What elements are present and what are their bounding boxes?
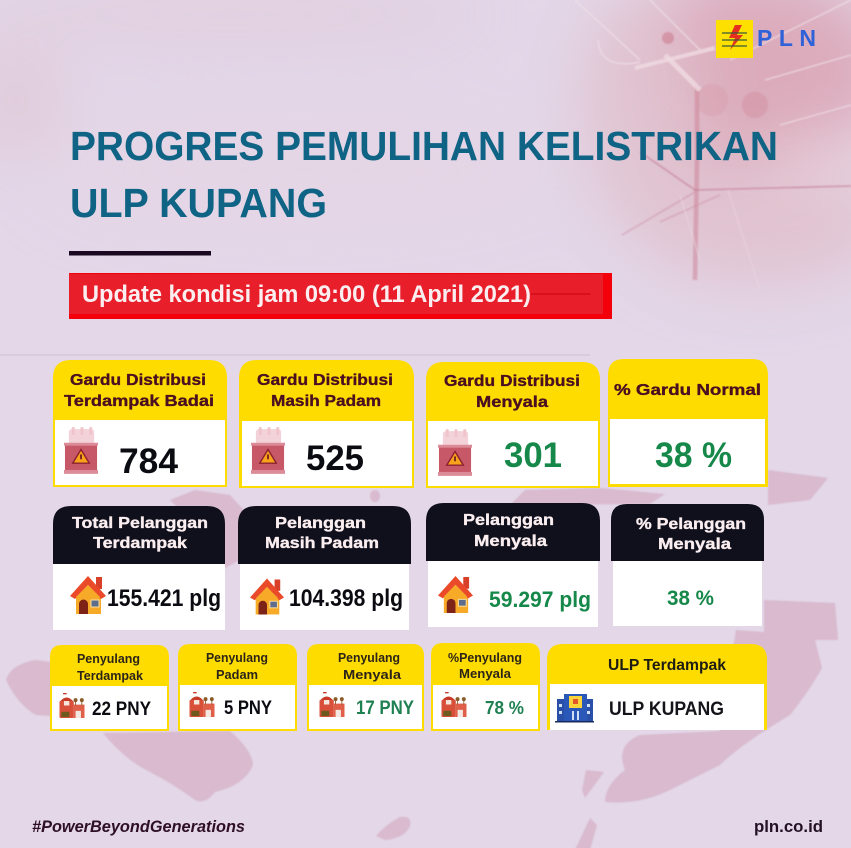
panel: gardu terdampak: Terdampak Badai	[64, 393, 214, 410]
panel: ulp terdampak	[547, 644, 767, 730]
panel: persen penyulang	[431, 643, 540, 731]
icon: house	[70, 576, 106, 614]
panel: pelanggan menyala: 59.297 plg	[489, 587, 591, 612]
panel: persen pelanggan	[611, 504, 764, 626]
icon: house	[438, 576, 473, 613]
icon: transformer	[64, 427, 98, 474]
panel: penyulang padam: Padam	[216, 667, 258, 682]
panel: total pelanggan	[53, 506, 225, 630]
panel: pelanggan padam: Masih Padam	[265, 535, 379, 552]
panel: pelanggan menyala: Pelanggan	[463, 512, 554, 529]
panel: total pelanggan: 155.421 plg	[107, 585, 221, 612]
panel: penyulang terdampak: 22 PNY	[92, 699, 151, 720]
update banner	[69, 273, 612, 319]
icon: substation building	[442, 692, 466, 717]
panel: total pelanggan: Total Pelanggan	[72, 515, 208, 532]
update banner: Update kondisi jam 09:00 (11 April 2021)	[82, 281, 531, 308]
panel: persen gardu normal	[608, 359, 768, 487]
icon: substation building	[190, 692, 214, 717]
icon: transformer	[438, 429, 472, 476]
title rule	[69, 251, 211, 256]
title	[70, 123, 778, 226]
panel: persen penyulang: 78 %	[485, 698, 524, 718]
panel: gardu padam: Masih Padam	[271, 393, 381, 410]
panel: penyulang terdampak: Terdampak	[77, 668, 144, 683]
panel: gardu menyala: Menyala	[476, 394, 548, 411]
panel: pelanggan padam: Pelanggan	[275, 515, 366, 532]
panel: persen gardu normal: 38 %	[655, 436, 732, 475]
panel: gardu terdampak	[53, 360, 227, 487]
panel: penyulang terdampak: Penyulang	[77, 651, 140, 666]
hashtag: #PowerBeyondGenerations	[32, 817, 245, 836]
logo: PLN: PLN	[757, 25, 816, 51]
panel: pelanggan menyala	[426, 503, 600, 627]
icon: substation building	[320, 692, 344, 717]
panel: persen penyulang: %Penyulang	[448, 650, 522, 665]
panel: ulp terdampak: ULP Terdampak	[608, 657, 726, 674]
panel: gardu menyala: Gardu Distribusi	[444, 373, 580, 390]
map of islands	[6, 470, 838, 848]
icon: transformer	[251, 427, 285, 474]
icon: office building	[555, 694, 594, 722]
panel: gardu padam: 525	[306, 439, 364, 478]
panel: penyulang padam: Penyulang	[206, 650, 268, 665]
panel: total pelanggan: Terdampak	[93, 535, 187, 552]
panel: persen pelanggan: 38 %	[667, 587, 714, 610]
panel: penyulang menyala: 17 PNY	[356, 698, 414, 719]
panel: persen penyulang: Menyala	[459, 666, 512, 681]
panel: gardu terdampak: 784	[119, 442, 179, 481]
panel: penyulang menyala	[307, 644, 424, 731]
photo: damaged power pole	[575, 0, 851, 290]
website: pln.co.id	[754, 817, 823, 836]
icon: substation building	[60, 693, 84, 718]
panel: penyulang menyala: Menyala	[343, 667, 402, 682]
panel: pelanggan padam	[238, 506, 411, 630]
icon: house	[250, 579, 284, 614]
panel: gardu menyala	[426, 362, 600, 488]
panel: penyulang padam	[178, 644, 297, 731]
panel: gardu padam: Gardu Distribusi	[257, 372, 393, 389]
panel: persen pelanggan: % Pelanggan	[636, 516, 746, 533]
title: ULP KUPANG	[70, 180, 327, 226]
panel: ulp terdampak: ULP KUPANG	[609, 699, 724, 720]
panel: gardu terdampak: Gardu Distribusi	[70, 372, 206, 389]
title: PROGRES PEMULIHAN KELISTRIKAN	[70, 123, 778, 169]
panel: penyulang terdampak	[50, 645, 169, 731]
logo: PLN	[716, 20, 816, 58]
panel: gardu padam	[239, 360, 414, 488]
panel: gardu menyala: 301	[504, 436, 562, 475]
panel: penyulang menyala: Penyulang	[338, 650, 400, 665]
panel: persen pelanggan: Menyala	[658, 536, 731, 553]
panel: pelanggan padam: 104.398 plg	[289, 585, 403, 612]
panel: pelanggan menyala: Menyala	[474, 533, 547, 550]
panel: penyulang padam: 5 PNY	[224, 698, 272, 719]
panel: persen gardu normal: % Gardu Normal	[614, 382, 761, 399]
